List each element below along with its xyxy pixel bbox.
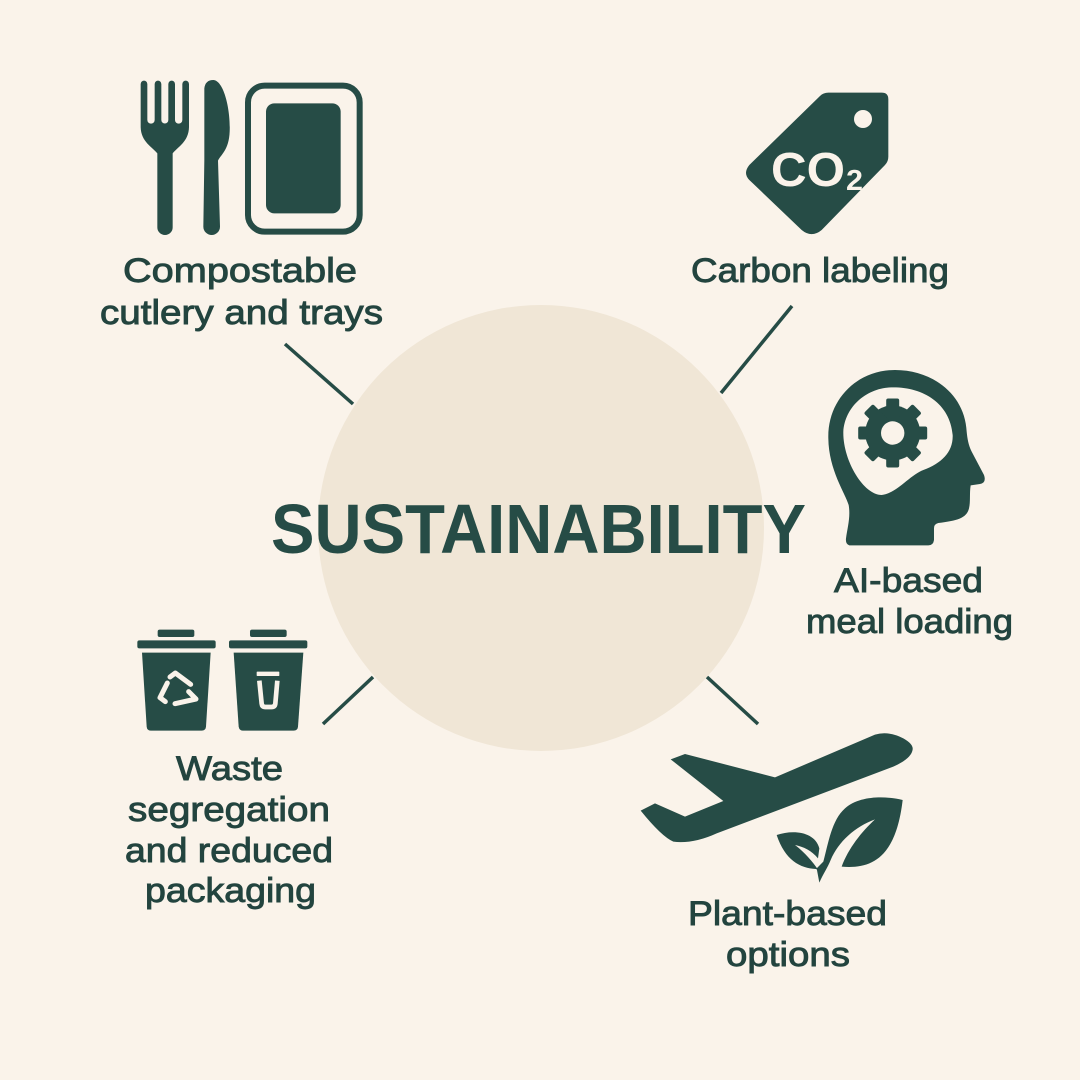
- label: waste segregation and reduced packaging: [125, 750, 333, 910]
- connector lines: [285, 306, 792, 724]
- label: AI-based meal loading: [806, 562, 1013, 641]
- panel: compostable cutlery and trays: [100, 80, 383, 332]
- label: plant-based options: [688, 895, 887, 974]
- label: waste segregation and reduced packaging: packaging: [145, 872, 316, 910]
- icon: airplane with leaves: [641, 733, 913, 883]
- icon: CO2 tag: CO: [771, 144, 845, 197]
- panel: waste segregation and reduced packaging: [125, 630, 333, 910]
- icon: head with gear: [828, 370, 985, 545]
- icon: CO2 tag: 2: [846, 165, 863, 197]
- label: plant-based options: Plant-based: [688, 895, 887, 933]
- panel: carbon labeling: [691, 93, 949, 290]
- label: plant-based options: options: [726, 936, 850, 974]
- icon: fork, knife and tray: [141, 80, 360, 235]
- title: SUSTAINABILITY: [271, 490, 806, 568]
- central circle: [318, 305, 764, 751]
- label: carbon labeling: Carbon labeling: [691, 252, 949, 290]
- label: waste segregation and reduced packaging: segregation: [128, 791, 330, 829]
- label: waste segregation and reduced packaging: and reduced: [125, 832, 333, 870]
- icon: two waste bins: [137, 630, 307, 731]
- label: AI-based meal loading: meal loading: [806, 603, 1013, 641]
- panel: AI-based meal loading: [806, 370, 1013, 641]
- label: AI-based meal loading: AI-based: [834, 562, 983, 600]
- label: compostable cutlery and trays: [100, 252, 383, 332]
- label: compostable cutlery and trays: cutlery and trays: [100, 294, 383, 332]
- label: waste segregation and reduced packaging: Waste: [176, 750, 283, 788]
- icon: CO2 tag: [746, 93, 888, 234]
- panel: plant-based options: [641, 733, 913, 974]
- label: compostable cutlery and trays: Compostable: [123, 252, 357, 290]
